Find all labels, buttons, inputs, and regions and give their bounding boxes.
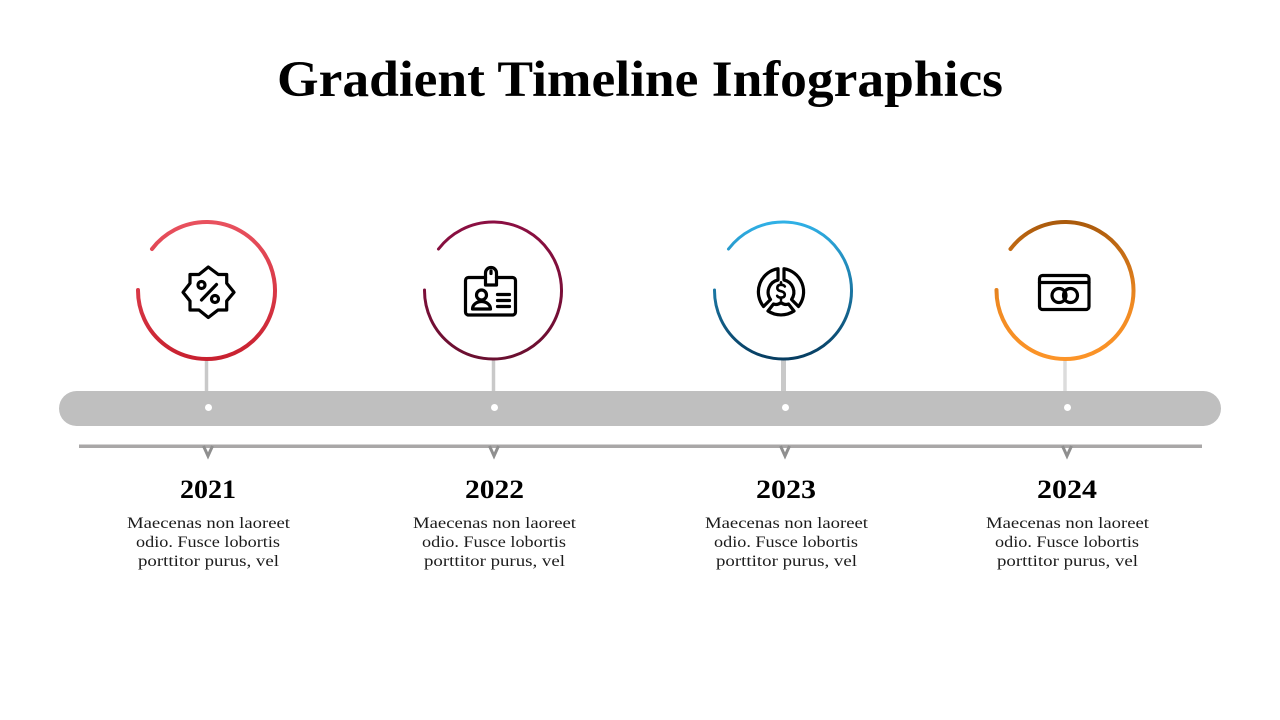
description 2022 [413,515,577,570]
connector 2022 [492,359,495,391]
description 2024: Maecenas non laoreet [986,515,1150,532]
description 2023 [705,515,869,570]
connector 2021 [205,360,208,391]
description 2023: Maecenas non laoreet [705,515,869,532]
ring 2024 [996,222,1133,359]
year 2023: 2023 [756,475,816,504]
year 2022: 2022 [465,475,524,504]
milestone 2023 [705,222,869,570]
milestone 2024 [986,222,1150,570]
description 2024 [986,515,1150,570]
connector 2023 [781,359,786,391]
icon: credit card [1040,276,1089,310]
icon: ID badge [466,268,516,315]
connector 2024 [1063,360,1067,391]
year 2021: 2021 [180,475,236,504]
notched rule under bar [79,444,1202,456]
description 2024: odio. Fusce lobortis [995,534,1139,551]
title: Gradient Timeline Infographics [277,52,1003,108]
description 2021 [127,515,291,570]
milestone 2021 [127,222,291,570]
description 2023: odio. Fusce lobortis [714,534,858,551]
description 2023: porttitor purus, vel [716,553,858,570]
description 2022: Maecenas non laoreet [413,515,577,532]
description 2021: odio. Fusce lobortis [136,534,280,551]
description 2021: Maecenas non laoreet [127,515,291,532]
icon: percent badge [183,267,234,318]
milestone 2022 [413,222,577,570]
description 2021: porttitor purus, vel [138,553,280,570]
ring 2023 [714,222,851,359]
description 2024: porttitor purus, vel [997,553,1139,570]
icon: dollar pie [758,269,804,315]
ring 2022 [424,222,561,359]
year 2024: 2024 [1037,475,1097,504]
ring 2021 [138,222,275,359]
timeline bar [59,391,1221,426]
description 2022: odio. Fusce lobortis [422,534,566,551]
description 2022: porttitor purus, vel [424,553,566,570]
